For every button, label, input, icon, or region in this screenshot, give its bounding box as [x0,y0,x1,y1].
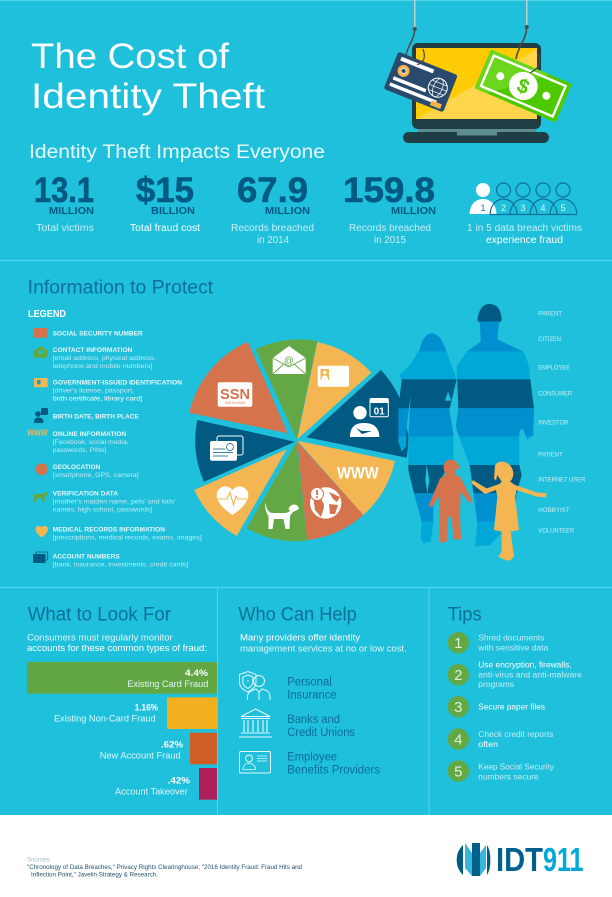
tip 1: Shred documents [478,634,544,643]
provider: banks and credit unions: Credit Unions [287,727,355,739]
stat: 1 in 5 victims with people icons: 1 in 5 data breach victims [467,223,582,234]
sources: Inflection Point," Javelin Strategy & Research. [31,872,158,878]
bar: existing non-card fraud: Existing Non-Card Fraud [54,714,156,725]
stat: 1 in 5 victims with people icons: 5 [560,203,566,213]
provider: banks and credit unions: Banks and [287,714,340,726]
stat: records breached 2015: in 2015 [374,235,406,246]
tip 2 [448,660,583,689]
pie chart: information categories [189,339,408,541]
legend [27,308,202,568]
role labels: EMPLOYEE [538,365,571,372]
legend: account numbers [33,552,188,568]
provider: personal insurance: Insurance [287,689,337,701]
legend: verification data: [mother's maiden name, pets' and kids' [53,499,176,506]
bar: existing card fraud: Existing Card Fraud [127,679,208,690]
stat: total fraud cost [130,171,200,234]
tip 5: 5 [454,763,462,780]
role labels: CITIZEN [538,336,561,343]
stat: records breached 2015: 159.8 [343,171,435,210]
title: The Cost of [31,36,229,76]
stat: records breached 2014: in 2014 [257,235,289,246]
logo: IDT911 [457,841,584,878]
bar: existing non-card fraud [54,697,217,729]
stat: 1 in 5 victims with people icons [467,183,582,246]
legend: medical records information: MEDICAL RECORDS INFORMATION [53,527,165,534]
legend: government-issued identification: GOVERNMENT-ISSUED IDENTIFICATION [53,379,182,386]
slice: account numbers [195,420,295,482]
legend: online information [27,429,129,454]
intro text: Many providers offer identity [240,633,360,644]
panel: tips [448,605,583,782]
role labels: VOLUNTEER [538,528,575,535]
stat: 1 in 5 victims with people icons: experience fraud [486,235,563,246]
stat: records breached 2014: Records breached [231,223,314,234]
provider: employee benefits providers [240,751,380,776]
stat: 1 in 5 victims with people icons: 1 [480,203,486,213]
stat: 1 in 5 victims with people icons: 3 [520,203,526,213]
silhouette: boy [429,460,472,543]
logo: IDT911: IDT [496,841,543,878]
stat: records breached 2015 [343,171,436,246]
role labels: CONSUMER [538,391,572,398]
bar chart: fraud types [27,662,217,800]
legend: verification data: VERIFICATION DATA [53,491,118,498]
slice: medical records [194,449,287,536]
tip 2: Use encryption, firewalls, [478,660,572,669]
legend: online information: WWW [27,429,48,438]
icon: banknote [475,49,572,123]
legend: account numbers: ACCOUNT NUMBERS [53,553,120,560]
legend: contact information: [email address, physical address, [53,355,156,362]
logo: IDT911: 911 [543,841,584,878]
stat: total fraud cost: BILLION [151,206,195,217]
legend: geolocation [36,463,139,479]
tip 4 [448,728,553,750]
slice: verification data [247,442,307,541]
tip 2: programs [478,680,514,689]
legend heading: LEGEND [28,308,66,320]
legend: birth date, birth place: BIRTH DATE, BIRTH PLACE [53,413,139,420]
stat: records breached 2015: MILLION [391,206,436,217]
intro text [27,633,207,654]
legend: government-issued identification: birth certificate, library card] [53,395,143,402]
legend: online information: passwords, PINs] [53,447,107,454]
provider: employee benefits providers: Employee [287,751,337,763]
legend: contact information: CONTACT INFORMATION [53,347,133,354]
legend: contact information [34,346,156,370]
role labels: PARENT [538,311,562,318]
legend: birth date, birth place [34,408,139,423]
sources: "Chronology of Data Breaches," Privacy Rights Clearinghouse; "2016 Identity Fraud: Fraud Hits and [27,865,302,871]
tip 3 [448,696,545,717]
panel: what to look for [27,605,217,800]
legend: online information: ONLINE INFORMATION [53,431,127,438]
stat: total victims: Total victims [36,223,94,234]
tip 1 [448,632,549,653]
intro text [240,633,407,654]
legend: medical records information: [prescriptions, medical records, exams, images] [53,535,202,542]
stat: total victims: 13.1 [34,171,94,210]
stat: records breached 2014 [231,171,314,246]
intro text: Consumers must regularly monitor [27,633,173,644]
bar: existing card fraud: 4.4% [185,668,209,679]
legend: medical records information [36,526,202,542]
tip 3: 3 [454,699,462,716]
slice: geolocation [297,442,363,540]
legend: verification data [32,489,176,514]
stat: total fraud cost: $15 [136,171,194,210]
tip 3: Secure paper files [478,703,545,712]
slice: government-issued identification [297,342,371,439]
heading: Who Can Help [238,605,357,626]
legend: contact information: telephone and mobile numbers] [53,363,153,370]
icon: credit card [384,52,458,112]
bar: account takeover: Account Takeover [115,786,188,797]
tip 1: 1 [454,635,462,652]
heading: What to Look For [28,605,172,626]
bar: new account fraud [100,733,217,764]
role labels: INTERNET USER [538,476,586,483]
title: Identity Theft [31,76,265,116]
sources [27,858,302,878]
heading: Tips [448,605,482,626]
legend: social security number [34,328,143,338]
title [31,36,265,116]
slice: social security number: SSN [220,386,250,403]
tip 2: anti-virus and anti-malware [478,670,583,679]
slice: birth date, birth place [307,370,408,458]
bar: account takeover [115,768,217,800]
silhouette: striped adults [398,304,534,546]
icon: banknote: $ [513,75,532,99]
provider: personal insurance: Personal [287,676,332,688]
role labels: PATIENT [538,452,563,459]
provider: personal insurance [240,672,337,701]
role labels: INVESTOR [538,419,569,426]
legend: social security number: SOCIAL SECURITY NUMBER [53,331,143,338]
bar: existing non-card fraud: 1.16% [135,703,158,714]
slice: online information [297,441,395,515]
panel: who can help [238,605,407,776]
stat: total fraud cost: Total fraud cost [130,223,200,234]
sources: Sources: [27,858,51,864]
provider: employee benefits providers: Benefits Providers [287,764,380,776]
silhouette: girl [472,462,547,561]
bar: new account fraud: New Account Fraud [100,751,181,762]
legend: online information: [Facebook, social media, [53,439,129,446]
tip 1: with sensitive data [477,643,549,652]
bar: new account fraud: .62% [161,740,184,751]
slice: contact information: @ [284,356,294,367]
logo emblem [457,843,490,876]
provider: banks and credit unions [239,709,355,739]
slice: online information: WWW [337,463,380,482]
tip 4: 4 [454,731,462,748]
tip 4: Check credit reports [478,730,553,739]
slice: social security number: 000-00-0000 [225,401,245,405]
intro text: accounts for these common types of fraud: [27,643,207,654]
slice: birth date, birth place: 01 [374,406,385,418]
heading: identity theft impacts everyone: Identity Theft Impacts Everyone [29,142,325,163]
stat: 1 in 5 victims with people icons: 2 [501,203,506,213]
tip 2: 2 [454,667,462,684]
slice: contact information [256,339,317,439]
stat: 1 in 5 victims with people icons: 4 [540,203,546,213]
legend: geolocation: [smartphone, GPS, camera] [53,472,139,479]
legend: government-issued identification: [driver's license, passport, [53,387,134,394]
bar: account takeover: .42% [168,775,191,786]
role labels [538,311,586,535]
tip 5 [448,760,554,782]
legend: verification data: names, high school, passwords] [53,507,153,514]
legend: geolocation: GEOLOCATION [53,464,101,471]
stat: total victims [34,171,94,234]
legend: government-issued identification [34,378,182,402]
silhouettes: family with striped adults [390,300,547,561]
slice: social security number [189,342,288,433]
intro text: management services at no or low cost. [240,643,407,654]
role labels: HOBBYIST [538,507,570,514]
stat: records breached 2014: MILLION [265,206,310,217]
heading: information to protect: Information to Protect [28,277,214,298]
tip 5: numbers secure [478,772,539,781]
illustration: laptop with hooked card and money [384,0,572,143]
stat: total victims: MILLION [49,206,94,217]
legend: account numbers: [bank, insurance, investments, credit cards] [53,561,188,568]
stat: records breached 2015: Records breached [349,223,431,234]
tip 4: often [478,740,498,749]
stat: records breached 2014: 67.9 [237,171,308,210]
tip 5: Keep Social Security [478,763,554,772]
bar: existing card fraud [27,662,217,694]
